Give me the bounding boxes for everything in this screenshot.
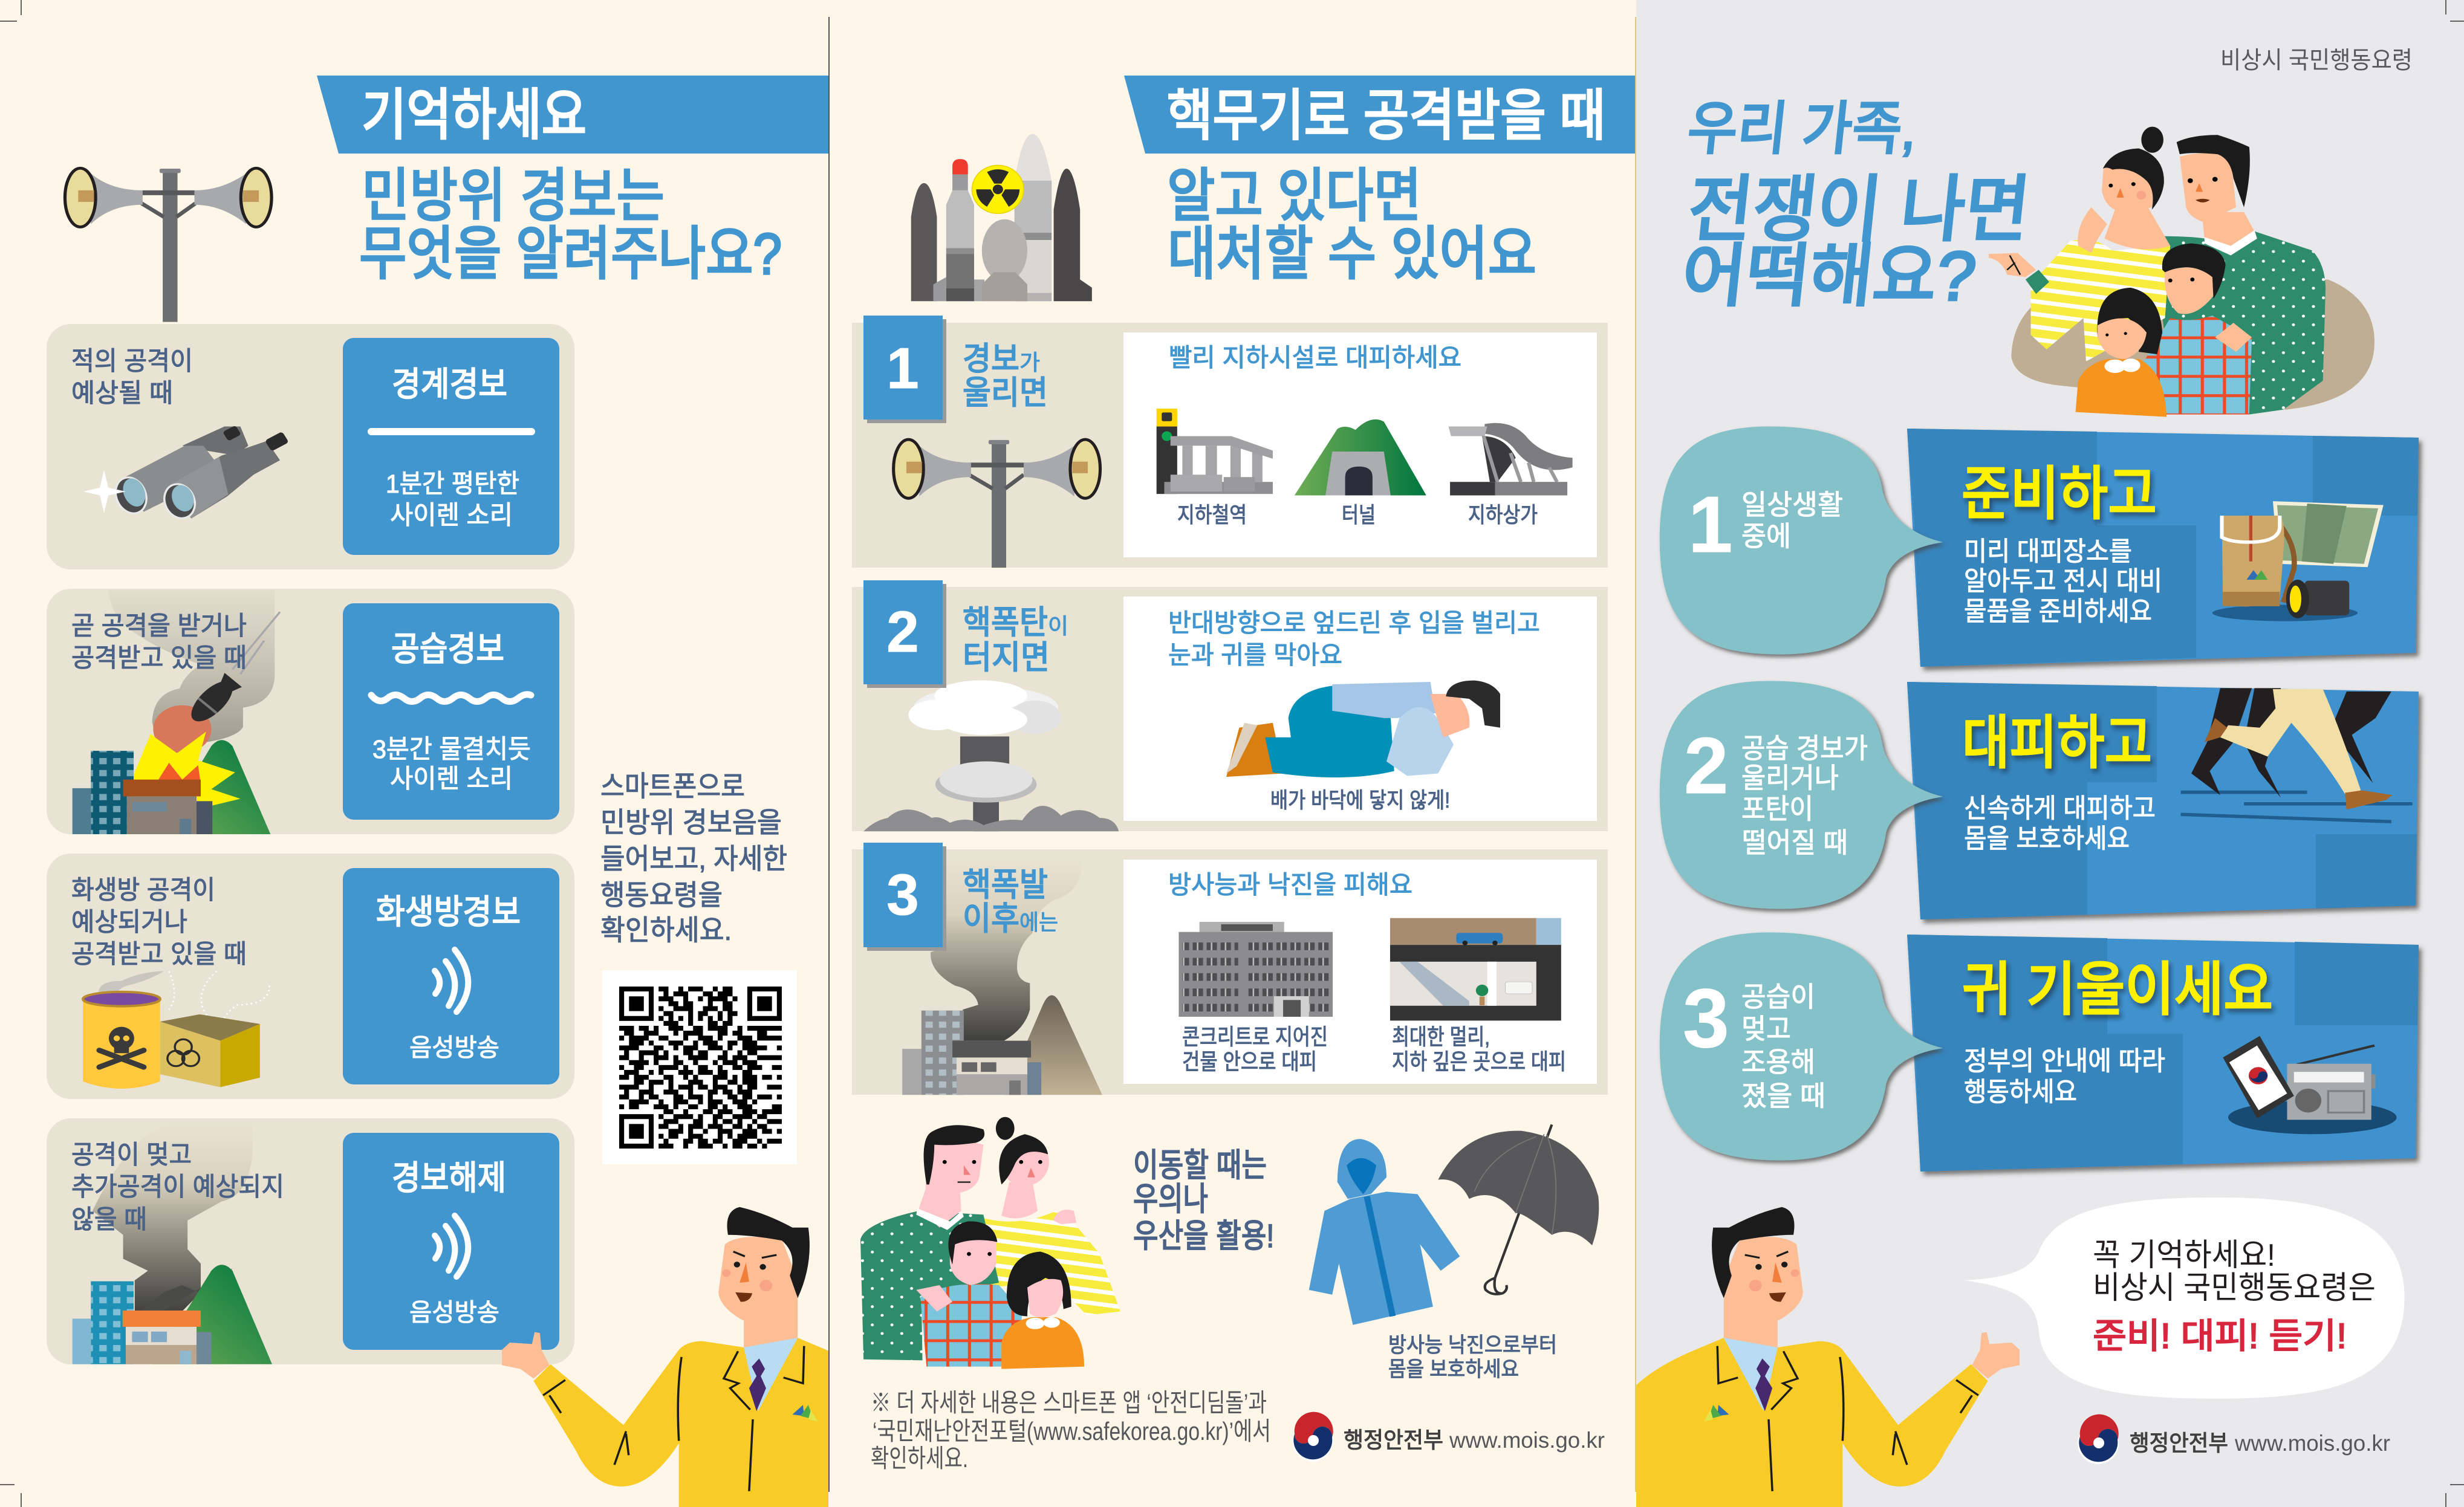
- text: wear raincoat or umbrella: 이동할 때는: [1133, 1147, 1267, 1184]
- daughter: [1001, 1251, 1084, 1369]
- bubble text 3: [1683, 972, 1825, 1112]
- icon: tunnel: [1295, 420, 1426, 496]
- text: prepare supplies: 미리 대피장소를: [1964, 537, 2132, 566]
- heading: our family in war: 어떡해요?: [1678, 238, 1980, 315]
- banner: listen: [1907, 935, 2419, 1172]
- QR code: [602, 970, 797, 1164]
- logo: ministry of interior and safety: [1292, 1412, 1605, 1462]
- bubble text 1: 1: [1688, 480, 1732, 569]
- bubble: in daily life: [1660, 427, 1943, 655]
- bubble text 1: 일상생활: [1741, 489, 1843, 520]
- section 2: when bomb explodes: [852, 580, 1608, 831]
- text: when enemy attack expected: [71, 347, 193, 408]
- text: prepare supplies: [1964, 537, 2162, 626]
- footnote: more information: 확인하세요.: [871, 1444, 968, 1473]
- illustration: concrete building: [1178, 922, 1333, 1017]
- banner: prepare: 준비하고: [1962, 462, 2157, 527]
- text: when attacked: [71, 612, 247, 673]
- text: attack ended: 않을 때: [71, 1205, 147, 1234]
- text: lie face down: [1168, 609, 1540, 669]
- labels: shelters: 지하철역: [1177, 502, 1247, 527]
- card: all clear: [47, 1118, 574, 1364]
- text: after explosion: 에는: [1019, 910, 1058, 935]
- illustration: family looking ahead: [860, 1117, 1120, 1369]
- card: air raid alert: [47, 589, 574, 834]
- labels: shelter guidance: 콘크리트로 지어진: [1182, 1025, 1328, 1049]
- icon: umbrella: [1438, 1124, 1599, 1294]
- footnote: more information: ‘국민재난안전포털(www.safekorea.go.kr)’에서: [873, 1417, 1271, 1445]
- illustration: family pointing: [1989, 127, 2375, 417]
- illustration: running legs: [2181, 688, 2413, 822]
- heading: what sirens tell: [359, 164, 782, 287]
- banner: evacuate: 대피하고: [1962, 711, 2152, 776]
- character: man in yellow jacket: [1628, 1207, 2020, 1507]
- heading: our family in war: 전쟁이 나면: [1684, 169, 2033, 250]
- text: prepare supplies: 알아두고 전시 대비: [1964, 566, 2162, 596]
- panel: remember sirens: [47, 76, 893, 1507]
- number badge 1: [863, 316, 946, 423]
- heading band: remember: [317, 76, 828, 154]
- icon: phone and radio: [2223, 1036, 2397, 1134]
- text: siren sounds: 울리면: [963, 375, 1048, 411]
- box: all clear broadcast: 경보해제: [392, 1159, 506, 1197]
- icon: siren tower: [65, 168, 271, 322]
- logo: ministry of interior and safety: www.mois.go.kr: [2234, 1431, 2390, 1456]
- icon: sound waves: [435, 950, 468, 1012]
- section 1: when siren sounds: [852, 316, 1608, 568]
- text: after explosion: 이후: [963, 901, 1019, 937]
- illustration: bombed city: [73, 590, 280, 834]
- number badge 2: [863, 580, 946, 688]
- icon: sound waves: [435, 1216, 468, 1277]
- logo: ministry of interior and safety: 행정안전부: [1344, 1428, 1443, 1453]
- text: attack ended: 공격이 멎고: [71, 1141, 192, 1170]
- labels: shelter guidance: [1182, 1025, 1566, 1074]
- heading band: nuclear attack: 핵무기로 공격받을 때: [1167, 85, 1605, 147]
- caption: keep belly off ground: 배가 바닥에 닿지 않게!: [1270, 788, 1450, 812]
- box: air raid siren: 3분간 물결치듯: [372, 735, 531, 764]
- section 3: after explosion: [852, 843, 1608, 1095]
- text: lie face down: 반대방향으로 엎드린 후 입을 벌리고: [1168, 609, 1540, 637]
- mother: [983, 1117, 1120, 1315]
- father: [2152, 135, 2326, 415]
- bubble text 3: 멎고: [1741, 1013, 1791, 1045]
- labels: shelter guidance: 지하 깊은 곳으로 대피: [1392, 1049, 1566, 1074]
- text: attack ended: [71, 1141, 284, 1234]
- text: follow government guidance: 행동하세요: [1964, 1077, 2077, 1107]
- row 3: listen: [1660, 933, 2419, 1172]
- illustration: crouching person: [1226, 681, 1500, 777]
- caption: protect from fallout: [1388, 1334, 1557, 1381]
- heading: what sirens tell: 무엇을 알려주나요?: [359, 222, 782, 287]
- text: chemical attack: [71, 876, 247, 969]
- text: evacuate quickly: [1964, 794, 2156, 854]
- text: chemical attack: 화생방 공격이: [71, 876, 215, 905]
- labels: shelter guidance: 최대한 멀리,: [1392, 1025, 1490, 1049]
- bubble text 1: 중에: [1741, 520, 1791, 552]
- labels: shelters: 터널: [1342, 502, 1376, 527]
- bubble text 2: 2: [1684, 721, 1728, 810]
- document title: 비상시 국민행동요령: [2220, 47, 2413, 74]
- text: follow government guidance: 정부의 안내에 따라: [1964, 1046, 2165, 1076]
- text: siren sounds: 가: [1019, 350, 1040, 375]
- bubble text 3: 조용해: [1741, 1046, 1815, 1078]
- panel: left background: [0, 0, 830, 1507]
- heading: our family in war: 우리 가족,: [1685, 97, 1920, 161]
- son: [2144, 244, 2252, 415]
- text: when attacked: 공격받고 있을 때: [71, 644, 247, 673]
- banner: listen: 귀 기울이세요: [1962, 958, 2273, 1022]
- text: evacuate quickly: 몸을 보호하세요: [1964, 824, 2130, 854]
- text: siren sounds: [963, 341, 1048, 411]
- text: prepare supplies: 물품을 준비하세요: [1964, 597, 2152, 626]
- box: CBR broadcast: 음성방송: [409, 1034, 499, 1061]
- text: wear raincoat or umbrella: 우산을 활용!: [1133, 1218, 1274, 1254]
- text: chemical attack: 공격받고 있을 때: [71, 940, 247, 969]
- text: smartphone instructions: [600, 770, 787, 946]
- text: lie face down: 눈과 귀를 막아요: [1168, 641, 1342, 669]
- bubble text 3: 공습이: [1741, 981, 1815, 1013]
- callout: remember: 꼭 기억하세요!: [2093, 1238, 2275, 1273]
- card: warning alert: [47, 324, 574, 569]
- text: siren sounds: 경보: [963, 341, 1019, 377]
- box: CBR broadcast: 화생방경보: [376, 893, 521, 931]
- footnote: more information: ※ 더 자세한 내용은 스마트폰 앱 ‘안전디딤돌’과: [871, 1389, 1267, 1417]
- box: warning alert siren: [343, 338, 559, 555]
- icon: raincoat: [1309, 1139, 1460, 1325]
- text: evacuate quickly: 신속하게 대피하고: [1964, 794, 2156, 823]
- bubble text 1: [1688, 480, 1843, 569]
- text: attack ended: 추가공격이 예상되지: [71, 1173, 284, 1202]
- bubble text 2: 떨어질 때: [1742, 827, 1848, 858]
- text: after explosion: 핵폭발: [963, 867, 1048, 903]
- logo: ministry of interior and safety: [2078, 1415, 2390, 1464]
- heading: can respond: [1167, 164, 1536, 287]
- icon: subway station: [1157, 409, 1273, 494]
- heading band: remember: 기억하세요: [362, 85, 587, 146]
- bubble: attack subsided: [1660, 933, 1943, 1161]
- text: evacuate underground: 빨리 지하시설로 대피하세요: [1169, 343, 1461, 372]
- daughter: [2076, 288, 2167, 417]
- box: air raid siren: 사이렌 소리: [390, 765, 513, 794]
- box: CBR broadcast: [343, 868, 559, 1084]
- panel: what to do in war: [1628, 0, 2464, 1507]
- icon: underground mall: [1449, 423, 1573, 496]
- callout: remember: [1964, 1197, 2405, 1399]
- number badge 1: 1: [886, 336, 919, 401]
- icon: siren: [894, 439, 1100, 568]
- caption: protect from fallout: 몸을 보호하세요: [1388, 1358, 1519, 1381]
- text: wear raincoat or umbrella: 우의나: [1133, 1181, 1208, 1217]
- text: wear raincoat or umbrella: [1133, 1147, 1274, 1254]
- bubble text 2: 울리거나: [1741, 762, 1839, 794]
- bubble text 2: [1684, 721, 1868, 858]
- banner: evacuate: [1907, 682, 2419, 919]
- text: avoid fallout: 방사능과 낙진을 피해요: [1168, 870, 1412, 899]
- text: when attacked: 곧 공격을 받거나: [71, 612, 247, 641]
- bubble text 2: 공습 경보가: [1741, 733, 1868, 764]
- logo: ministry of interior and safety: www.mois.go.kr: [1449, 1428, 1605, 1453]
- box: air raid siren: [343, 603, 559, 820]
- text: smartphone instructions: 스마트폰으로: [600, 770, 745, 802]
- box: all clear broadcast: [343, 1133, 559, 1350]
- bubble text 3: 졌을 때: [1741, 1080, 1825, 1112]
- illustration: mushroom cloud: [863, 681, 1119, 831]
- box: air raid siren: 공습경보: [391, 630, 504, 668]
- heading: what sirens tell: 민방위 경보는: [362, 164, 665, 228]
- illustration: toxic barrel and box: [83, 971, 270, 1089]
- box: all clear broadcast: 음성방송: [409, 1298, 499, 1326]
- father: [860, 1125, 999, 1360]
- caption: protect from fallout: 방사능 낙진으로부터: [1388, 1334, 1557, 1357]
- labels: shelters: [1177, 502, 1538, 527]
- footnote: more information: [871, 1389, 1271, 1473]
- text: when enemy attack expected: 적의 공격이: [71, 347, 193, 376]
- text: smartphone instructions: 확인하세요.: [600, 914, 732, 946]
- callout: remember: 비상시 국민행동요령은: [2093, 1271, 2376, 1306]
- text: after explosion: [963, 867, 1058, 937]
- character: man in yellow jacket: [502, 1207, 893, 1507]
- row 1: prepare: [1660, 427, 2419, 667]
- text: bomb explodes: 이: [1048, 614, 1068, 638]
- box: warning alert siren: 사이렌 소리: [390, 501, 513, 530]
- heading band: nuclear attack: [1124, 76, 1636, 154]
- illustration: smoke over city: [73, 1122, 272, 1364]
- logo: ministry of interior and safety: 행정안전부: [2130, 1431, 2228, 1456]
- text: follow government guidance: [1964, 1046, 2165, 1107]
- panel: nuclear attack: [828, 0, 1637, 1507]
- text: bomb explodes: 터지면: [963, 640, 1050, 676]
- mother: [1989, 127, 2170, 361]
- card: CBR alert: [47, 854, 574, 1099]
- labels: shelters: 지하상가: [1468, 502, 1538, 527]
- text: smartphone instructions: 행동요령을: [600, 879, 723, 911]
- labels: shelter guidance: 건물 안으로 대피: [1182, 1049, 1317, 1074]
- text: smartphone instructions: 민방위 경보음을: [600, 806, 782, 838]
- text: bomb explodes: [963, 604, 1068, 676]
- callout: remember: 준비! 대피! 듣기!: [2093, 1317, 2347, 1356]
- icon: missiles with radiation sign: [911, 134, 1092, 301]
- text: smartphone instructions: 들어보고, 자세한: [600, 843, 787, 875]
- number badge 3: 3: [886, 863, 919, 927]
- heading: can respond: 알고 있다면: [1167, 164, 1422, 228]
- son: [916, 1221, 1022, 1367]
- text: bomb explodes: 핵폭탄: [963, 604, 1048, 641]
- text: chemical attack: 예상되거나: [71, 908, 187, 937]
- number badge 3: [863, 843, 946, 951]
- heading: can respond: 대처할 수 있어요: [1168, 222, 1536, 287]
- heading: our family in war: [1678, 97, 2033, 315]
- box: warning alert siren: 1분간 평탄한: [386, 470, 519, 499]
- banner: prepare: [1907, 429, 2419, 667]
- number badge 2: 2: [886, 600, 919, 664]
- bubble text 2: 포탄이: [1741, 793, 1813, 825]
- bubble text 3: 3: [1683, 972, 1729, 1065]
- row 2: evacuate: [1660, 681, 2419, 919]
- illustration: deep underground: [1390, 918, 1561, 1020]
- icon: binoculars: [83, 426, 289, 522]
- box: warning alert siren: 경계경보: [392, 365, 507, 403]
- illustration: smoke and gray city: [902, 860, 1102, 1095]
- text: when enemy attack expected: 예상될 때: [71, 379, 173, 408]
- bubble: air raid alarm: [1660, 681, 1943, 909]
- icon: backpack, map, flashlight: [2212, 501, 2384, 621]
